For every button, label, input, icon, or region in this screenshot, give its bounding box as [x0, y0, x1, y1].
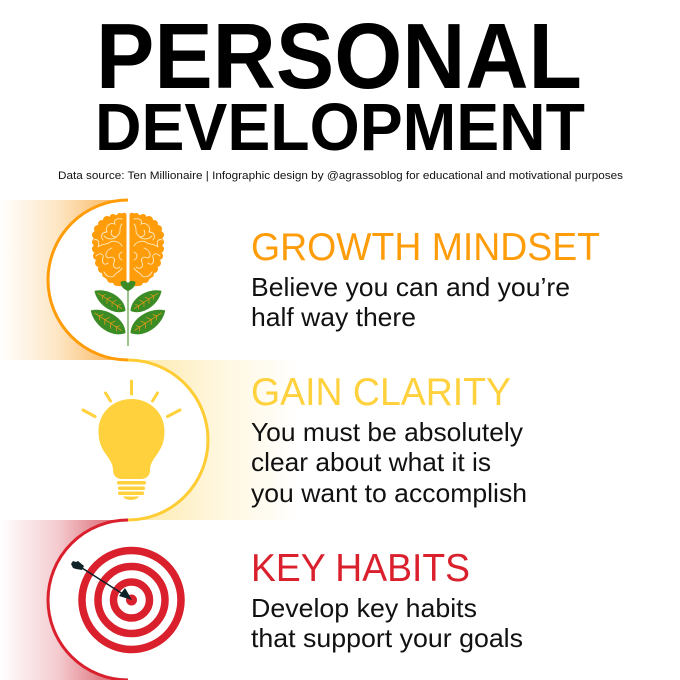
- body text: clear about what it is: [251, 447, 491, 477]
- red arc: [48, 520, 128, 680]
- yellow arc: [128, 360, 208, 520]
- title: [95, 4, 585, 165]
- body text: [251, 593, 523, 653]
- body text: half way there: [251, 302, 416, 332]
- body text: Develop key habits: [251, 593, 477, 623]
- panel: gain clarity: [83, 360, 527, 520]
- body text: [251, 272, 570, 332]
- body text: You must be absolutely: [251, 417, 523, 447]
- heading: growth mindset: GROWTH MINDSET: [251, 226, 600, 269]
- panel: growth mindset: [0, 200, 600, 360]
- icon: light bulb: [83, 381, 180, 500]
- yellow gradient band: [128, 360, 300, 520]
- body text: Believe you can and you’re: [251, 272, 570, 302]
- title: DEVELOPMENT: [95, 90, 585, 165]
- panel: key habits: [0, 520, 523, 680]
- icon: target with arrow: [71, 550, 181, 650]
- heading: key habits: KEY HABITS: [251, 547, 470, 590]
- title: PERSONAL: [96, 4, 582, 108]
- data source line: Data source: Ten Millionaire | Infographic design by @agrassoblog for educational and motivational purposes: [58, 170, 624, 182]
- icon: brain flower: [86, 213, 170, 346]
- orange arc: [48, 200, 128, 360]
- orange gradient band: [0, 200, 128, 360]
- body text: you want to accomplish: [251, 478, 527, 508]
- body text: that support your goals: [251, 623, 523, 653]
- heading: gain clarity: GAIN CLARITY: [251, 371, 511, 414]
- body text: [251, 417, 527, 508]
- red gradient band: [0, 520, 128, 680]
